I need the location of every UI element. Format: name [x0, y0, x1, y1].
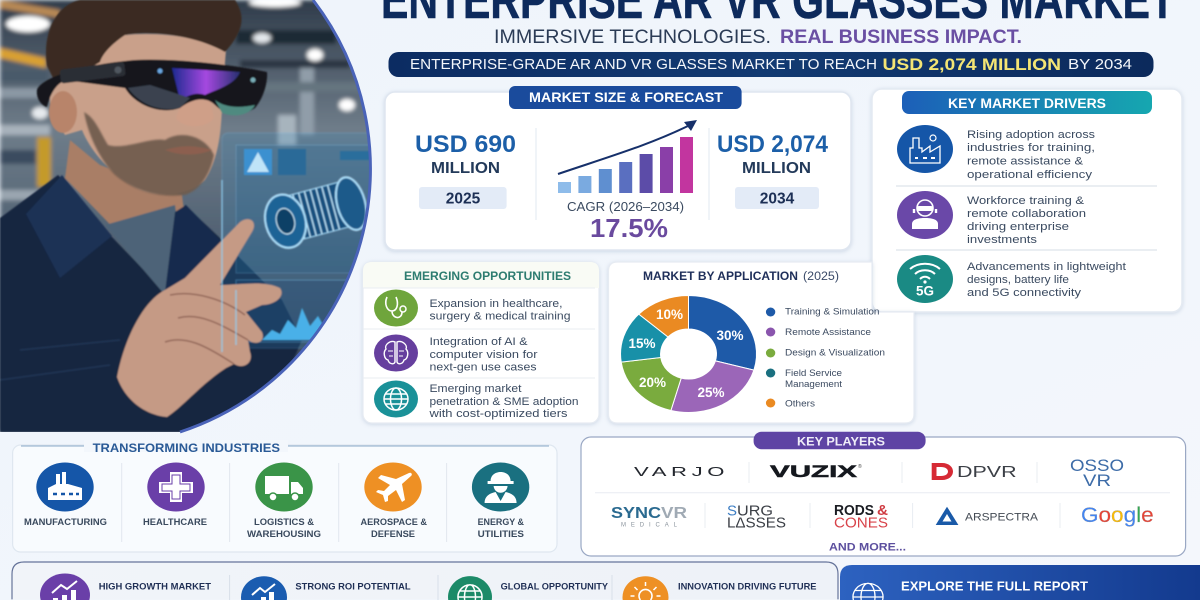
donut chart: 25%: [697, 385, 725, 400]
text: opportunity 3: Emerging market: [430, 383, 522, 395]
logo: Osso VR: VR: [1083, 472, 1111, 490]
industry: logistics: LOGISTICS &: [254, 517, 314, 528]
highlight: global opportunity: [448, 576, 609, 600]
industry: energy: [472, 462, 529, 540]
icon: 5G wifi: [897, 255, 953, 303]
industry: energy: ENERGY &: [478, 517, 524, 528]
donut chart: 15%: [628, 336, 656, 351]
banner: [388, 52, 1154, 77]
logo: DPVR: DPVR: [957, 464, 1017, 481]
industry: manufacturing: [24, 462, 107, 528]
stat: 2025 value: [415, 131, 516, 209]
text: opportunity 1: surgery & medical training: [430, 310, 570, 322]
industry: energy: UTILITIES: [478, 529, 524, 540]
text: driver 3: Advancements in lightweight: [967, 261, 1127, 273]
icon: brain: [374, 334, 418, 372]
stat: 2034 value: 2034: [760, 190, 795, 208]
text: driver 3: [967, 261, 1127, 299]
highlight: innovation driving future: INNOVATION DRIVING FUTURE: [678, 582, 816, 592]
donut chart: 20%: [639, 375, 666, 390]
stat: CAGR: 17.5%: [590, 213, 668, 243]
logo: SurgLasses: [727, 504, 786, 532]
legend: Design & Visualization: [785, 348, 885, 358]
bar chart: growth: [558, 120, 697, 193]
industry: aerospace: AEROSPACE &: [360, 517, 427, 528]
logo: Arspectra: ARSPECTRA: [965, 512, 1039, 524]
banner: BY 2034: [1068, 57, 1132, 73]
stat: 2025 value: USD 690: [415, 131, 516, 158]
highlight: strong ROI potential: STRONG ROI POTENTIAL: [295, 582, 411, 592]
industry: aerospace: [360, 462, 427, 540]
heading: market by application: MARKET BY APPLICATION: [643, 271, 798, 283]
logo: Rods and Cones: RODS: [834, 503, 874, 519]
panel: key players: [581, 432, 1186, 556]
industry: healthcare: [143, 462, 207, 528]
icon: globe: [853, 583, 883, 600]
heading: key market drivers: [902, 91, 1152, 114]
icon: person with VR headset: [897, 191, 953, 239]
logo: Varjo: VARJO: [634, 465, 724, 479]
text: driver 2: driving enterprise: [967, 221, 1069, 233]
logo: Rods and Cones: [834, 503, 889, 532]
text: driver 2: remote collaboration: [967, 208, 1086, 220]
text: opportunity 2: next-gen use cases: [430, 362, 537, 374]
text: driver 2: [967, 195, 1086, 246]
text: opportunity 2: Integration of AI &: [430, 336, 528, 348]
photo: engineer wearing AR glasses with hologram: [0, 0, 392, 432]
text: driver 1: [967, 129, 1095, 181]
panel: market by application: [608, 262, 914, 423]
heading: transforming industries: TRANSFORMING INDUSTRIES: [93, 441, 280, 455]
icon: factory: [897, 125, 953, 173]
donut chart: 30%: [716, 328, 744, 343]
icon: globe: [374, 380, 418, 418]
stat: 2034 value: [717, 131, 829, 209]
heading: key market drivers: KEY MARKET DRIVERS: [948, 96, 1106, 111]
logo: Google: Google: [1081, 504, 1154, 527]
legend: Others: [785, 398, 815, 410]
logo: SurgLasses: LΔSSES: [727, 516, 786, 532]
industry: logistics: WAREHOUSING: [247, 529, 321, 540]
logo: SyncVR Medical: SYNC: [611, 505, 662, 522]
text: opportunity 3: with cost-optimized tiers: [428, 408, 568, 420]
stat: 2034 value: USD 2,074: [717, 131, 829, 158]
text: driver 2: investments: [967, 234, 1037, 246]
industry: aerospace: DEFENSE: [371, 529, 415, 540]
logo: Rods and Cones: &: [877, 503, 889, 519]
logo: Vuzix: [770, 462, 862, 481]
text: opportunity 3: penetration & SME adoption: [430, 396, 578, 408]
subtitle: IMMERSIVE TECHNOLOGIES.: [494, 26, 771, 48]
logo: Rods and Cones: CONES: [834, 516, 888, 532]
banner: ENTERPRISE-GRADE AR AND VR GLASSES MARKET TO REACH: [410, 57, 877, 73]
legend: Field Service: [785, 368, 842, 379]
heading: emerging opportunities: EMERGING OPPORTUNITIES: [404, 269, 571, 283]
legend: [766, 306, 885, 410]
stat: CAGR: [567, 199, 684, 243]
logo: Vuzix: ®: [858, 463, 862, 470]
logo: SurgLasses: S: [727, 504, 737, 520]
stat: CAGR: CAGR (2026–2034): [567, 199, 684, 214]
logo: SyncVR Medical: [611, 505, 688, 529]
text: driver 3: designs, battery life: [967, 274, 1069, 286]
stat: 2034 value: MILLION: [742, 160, 811, 177]
heading: key players: [754, 432, 926, 449]
legend: Remote Assistance: [785, 327, 871, 338]
panel: market size and forecast: [385, 86, 851, 250]
text: driver 1: industries for training,: [967, 142, 1095, 154]
text: driver 1: operational efficiency: [967, 169, 1092, 181]
banner: USD 2,074 MILLION: [882, 55, 1061, 74]
donut chart: 10%: [656, 307, 683, 322]
text: driver 1: remote assistance &: [967, 156, 1084, 168]
highlight: global opportunity: GLOBAL OPPORTUNITY: [501, 582, 609, 592]
logo: Arspectra: [936, 507, 1039, 525]
text: driver 1: Rising adoption across: [967, 129, 1095, 141]
text: opportunity 1: [430, 298, 570, 322]
logo: SurgLasses: URG: [737, 504, 773, 520]
panel: transforming industries: [13, 440, 557, 552]
text: and more: AND MORE...: [829, 542, 906, 554]
call to action: explore the full report: EXPLORE THE FULL REPORT: [901, 579, 1088, 594]
industry: healthcare: HEALTHCARE: [143, 517, 207, 528]
donut chart: [621, 296, 757, 412]
heading: market by application: (2025): [803, 271, 839, 283]
stat: 2025 value: 2025: [446, 190, 481, 208]
highlight: strong ROI potential: [241, 576, 411, 600]
icon: 5G wifi: 5G: [916, 284, 934, 298]
subtitle: [494, 26, 1022, 48]
text: opportunity 1: Expansion in healthcare,: [430, 298, 562, 310]
icon: stethoscope: [374, 290, 418, 326]
logo: SyncVR Medical: MEDICAL: [621, 523, 678, 529]
call to action: explore the full report: [840, 565, 1200, 600]
highlight: high growth market: [40, 573, 211, 600]
panel: highlights strip: [12, 562, 838, 600]
panel: emerging opportunities: [363, 262, 599, 423]
text: driver 2: Workforce training &: [967, 195, 1085, 207]
legend: Training & Simulation: [785, 306, 880, 318]
logo: Vuzix: VUZIX: [770, 462, 858, 481]
highlight: innovation driving future: [622, 576, 816, 600]
heading: market size: MARKET SIZE & FORECAST: [529, 89, 723, 105]
logo: Osso VR: [1070, 457, 1124, 490]
industry: manufacturing: MANUFACTURING: [24, 517, 107, 528]
legend: Management: [785, 379, 842, 390]
stat: 2025 value: MILLION: [431, 160, 500, 177]
panel: key market drivers: [872, 89, 1182, 312]
text: opportunity 2: [430, 336, 538, 374]
logo: SyncVR Medical: VR: [661, 505, 688, 522]
heading: market size: [509, 86, 742, 109]
text: opportunity 3: [428, 383, 578, 420]
logo: Osso VR: OSSO: [1070, 457, 1124, 475]
subtitle: REAL BUSINESS IMPACT.: [780, 26, 1022, 48]
highlight: high growth market: HIGH GROWTH MARKET: [99, 582, 211, 592]
text: opportunity 2: computer vision for: [430, 349, 538, 361]
industry: logistics: [247, 462, 321, 540]
heading: key players: KEY PLAYERS: [797, 434, 885, 448]
text: driver 3: and 5G connectivity: [967, 287, 1081, 299]
logo: DPVR: [932, 463, 1017, 481]
